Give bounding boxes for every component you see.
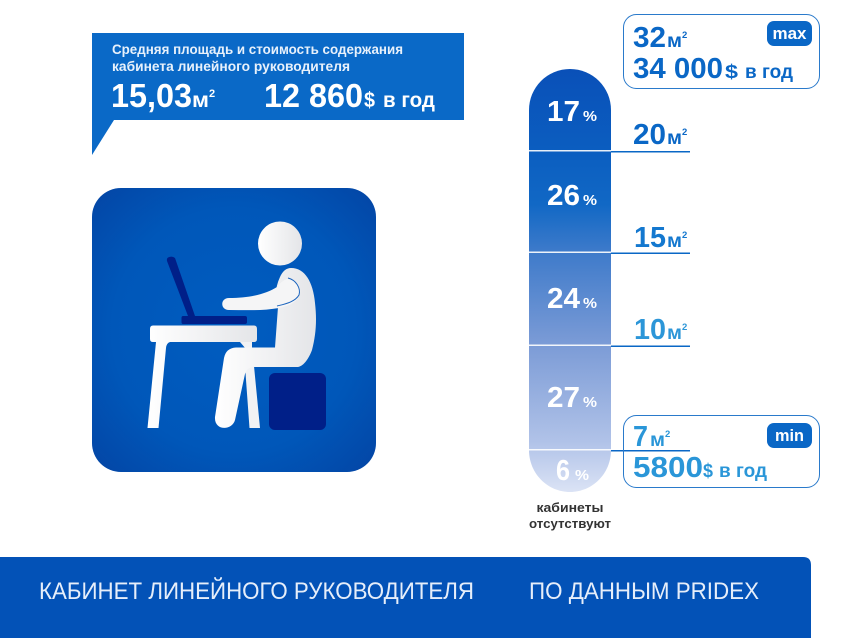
area label: 20 m2: м bbox=[667, 128, 682, 149]
callout: average area and cost bbox=[92, 33, 464, 155]
min badge: min bbox=[775, 426, 804, 445]
percent labels bbox=[547, 96, 597, 487]
callout background bbox=[92, 33, 464, 155]
percent labels: 6 bbox=[556, 455, 570, 487]
max badge: max bbox=[772, 24, 807, 43]
percent labels: % bbox=[583, 108, 597, 125]
min values: 5800 bbox=[633, 452, 703, 484]
min values: 2 bbox=[665, 429, 670, 440]
min values bbox=[633, 421, 767, 484]
percent labels: % bbox=[583, 295, 597, 312]
icon background bbox=[92, 188, 376, 472]
callout figures: в год bbox=[383, 89, 435, 112]
max values: $ bbox=[725, 62, 739, 83]
max box frame bbox=[624, 14, 820, 88]
footer title: КАБИНЕТ ЛИНЕЙНОГО РУКОВОДИТЕЛЯ bbox=[39, 577, 474, 605]
min values: $ bbox=[703, 461, 713, 482]
percent labels: 17 bbox=[547, 96, 580, 128]
area label: 20 m2 bbox=[633, 119, 687, 151]
area label: 15 m2: м bbox=[667, 231, 682, 252]
area label: 15 m2: 15 bbox=[634, 222, 666, 254]
max badge bbox=[767, 21, 812, 46]
min box bbox=[624, 416, 820, 488]
caption: no offices: отсутствуют bbox=[529, 516, 611, 531]
stool bbox=[269, 373, 326, 430]
callout figures: $ bbox=[364, 89, 375, 112]
min values: 7 bbox=[633, 421, 648, 453]
max values bbox=[633, 22, 793, 85]
person: arm bbox=[222, 279, 300, 310]
callout heading: кабинета линейного руководителя bbox=[112, 59, 350, 74]
leader lines bbox=[611, 151, 690, 452]
caption: no offices: кабинеты bbox=[536, 500, 604, 515]
area label: 15 m2: 2 bbox=[682, 230, 687, 241]
person: body and leg bbox=[215, 268, 316, 428]
callout figures: 2 bbox=[209, 88, 215, 100]
chart: distribution of offices by area bbox=[529, 69, 690, 531]
max values: в год bbox=[745, 62, 793, 83]
max values: 2 bbox=[682, 30, 687, 41]
area label: 20 m2: 20 bbox=[633, 119, 666, 151]
icon: person working at laptop bbox=[92, 188, 376, 472]
area label: 10 m2: м bbox=[667, 323, 682, 344]
min values: в год bbox=[719, 461, 767, 482]
max values: м bbox=[667, 31, 682, 52]
min box frame bbox=[624, 416, 820, 488]
min badge bbox=[767, 423, 812, 448]
percent labels: 27 bbox=[547, 382, 580, 414]
area label: 20 m2: 2 bbox=[682, 127, 687, 138]
percent labels: % bbox=[583, 394, 597, 411]
callout heading bbox=[112, 42, 403, 74]
area label: 10 m2: 10 bbox=[634, 314, 666, 346]
max values: 32 bbox=[633, 22, 666, 54]
percent labels: % bbox=[575, 467, 589, 484]
footer source: ПО ДАННЫМ PRIDEX bbox=[529, 578, 759, 605]
footer band bbox=[0, 557, 811, 638]
laptop bbox=[167, 257, 247, 324]
area label: 15 m2 bbox=[634, 222, 687, 254]
percent labels: 24 bbox=[547, 283, 580, 315]
area label: 10 m2 bbox=[634, 314, 687, 346]
max values: 34 000 bbox=[633, 53, 723, 85]
percent labels: 26 bbox=[547, 180, 580, 212]
max box bbox=[624, 14, 820, 88]
caption: no offices bbox=[529, 500, 611, 531]
table bbox=[148, 326, 257, 428]
stacked bar bbox=[529, 69, 611, 492]
callout figures: 12 860 bbox=[264, 77, 363, 114]
table right leg bbox=[240, 342, 260, 428]
area label: 10 m2: 2 bbox=[682, 322, 687, 333]
person: head bbox=[258, 222, 302, 266]
percent labels: % bbox=[583, 192, 597, 209]
callout heading: Средняя площадь и стоимость содержания bbox=[112, 42, 403, 57]
arm outline bbox=[277, 278, 299, 306]
min values: м bbox=[650, 430, 665, 451]
callout figures bbox=[111, 77, 435, 114]
footer background bbox=[0, 557, 811, 638]
callout figures: м bbox=[192, 89, 209, 112]
callout figures: 15,03 bbox=[111, 77, 192, 114]
